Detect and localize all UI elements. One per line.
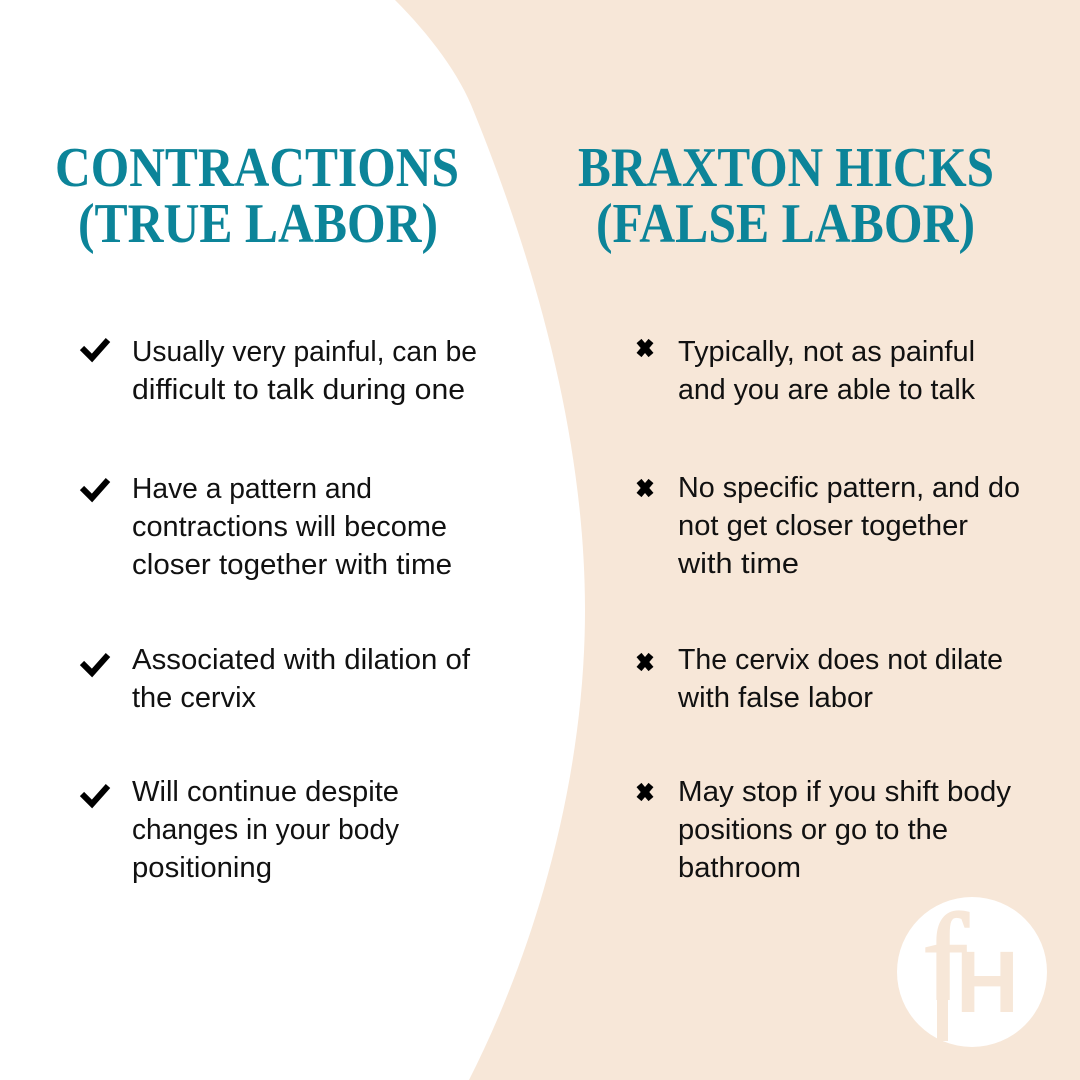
item: no dilation: with false labor bbox=[677, 682, 874, 714]
item: may stop: positions or go to the bbox=[678, 814, 948, 846]
heading: braxton hicks: (FALSE LABOR) bbox=[596, 193, 975, 255]
item: no pattern: No specific pattern, and do bbox=[678, 472, 1020, 504]
item: pattern: Have a pattern and bbox=[132, 473, 372, 505]
item: no dilation bbox=[639, 644, 1003, 714]
panel: true labor list bbox=[82, 336, 477, 884]
item: may stop bbox=[639, 776, 1012, 884]
icon: fH logo bbox=[897, 886, 1047, 1047]
panel: beige curved background bbox=[395, 0, 1080, 1080]
item: may stop: bathroom bbox=[678, 852, 801, 884]
item: pattern bbox=[82, 473, 452, 581]
item: positioning: Will continue despite bbox=[132, 776, 399, 808]
item: positioning: positioning bbox=[132, 852, 272, 884]
icon: fH logo: f bbox=[922, 886, 969, 1041]
item: painful: Usually very painful, can be bbox=[132, 336, 477, 368]
item: not as painful: Typically, not as painful bbox=[678, 336, 975, 368]
item: positioning: changes in your body bbox=[132, 814, 400, 846]
item: painful bbox=[82, 336, 477, 406]
panel: false labor list bbox=[639, 336, 1020, 884]
item: no dilation: The cervix does not dilate bbox=[678, 644, 1003, 676]
heading: braxton hicks bbox=[578, 137, 994, 255]
item: dilation bbox=[82, 644, 470, 714]
item: dilation: the cervix bbox=[132, 682, 256, 714]
item: pattern: closer together with time bbox=[132, 549, 452, 581]
item: dilation: Associated with dilation of bbox=[132, 644, 470, 676]
item: positioning bbox=[82, 776, 400, 884]
item: no pattern: with time bbox=[677, 548, 799, 580]
heading: contractions bbox=[55, 137, 459, 255]
icon: fH logo: H bbox=[956, 934, 1019, 1031]
heading: braxton hicks: BRAXTON HICKS bbox=[578, 137, 994, 199]
heading: contractions: (TRUE LABOR) bbox=[78, 193, 438, 255]
item: no pattern: not get closer together bbox=[678, 510, 969, 542]
item: not as painful: and you are able to talk bbox=[678, 374, 976, 406]
heading: contractions: CONTRACTIONS bbox=[55, 137, 459, 199]
item: not as painful bbox=[639, 336, 976, 406]
item: pattern: contractions will become bbox=[132, 511, 447, 543]
item: painful: difficult to talk during one bbox=[132, 374, 465, 406]
item: no pattern bbox=[639, 472, 1020, 580]
item: may stop: May stop if you shift body bbox=[678, 776, 1012, 808]
